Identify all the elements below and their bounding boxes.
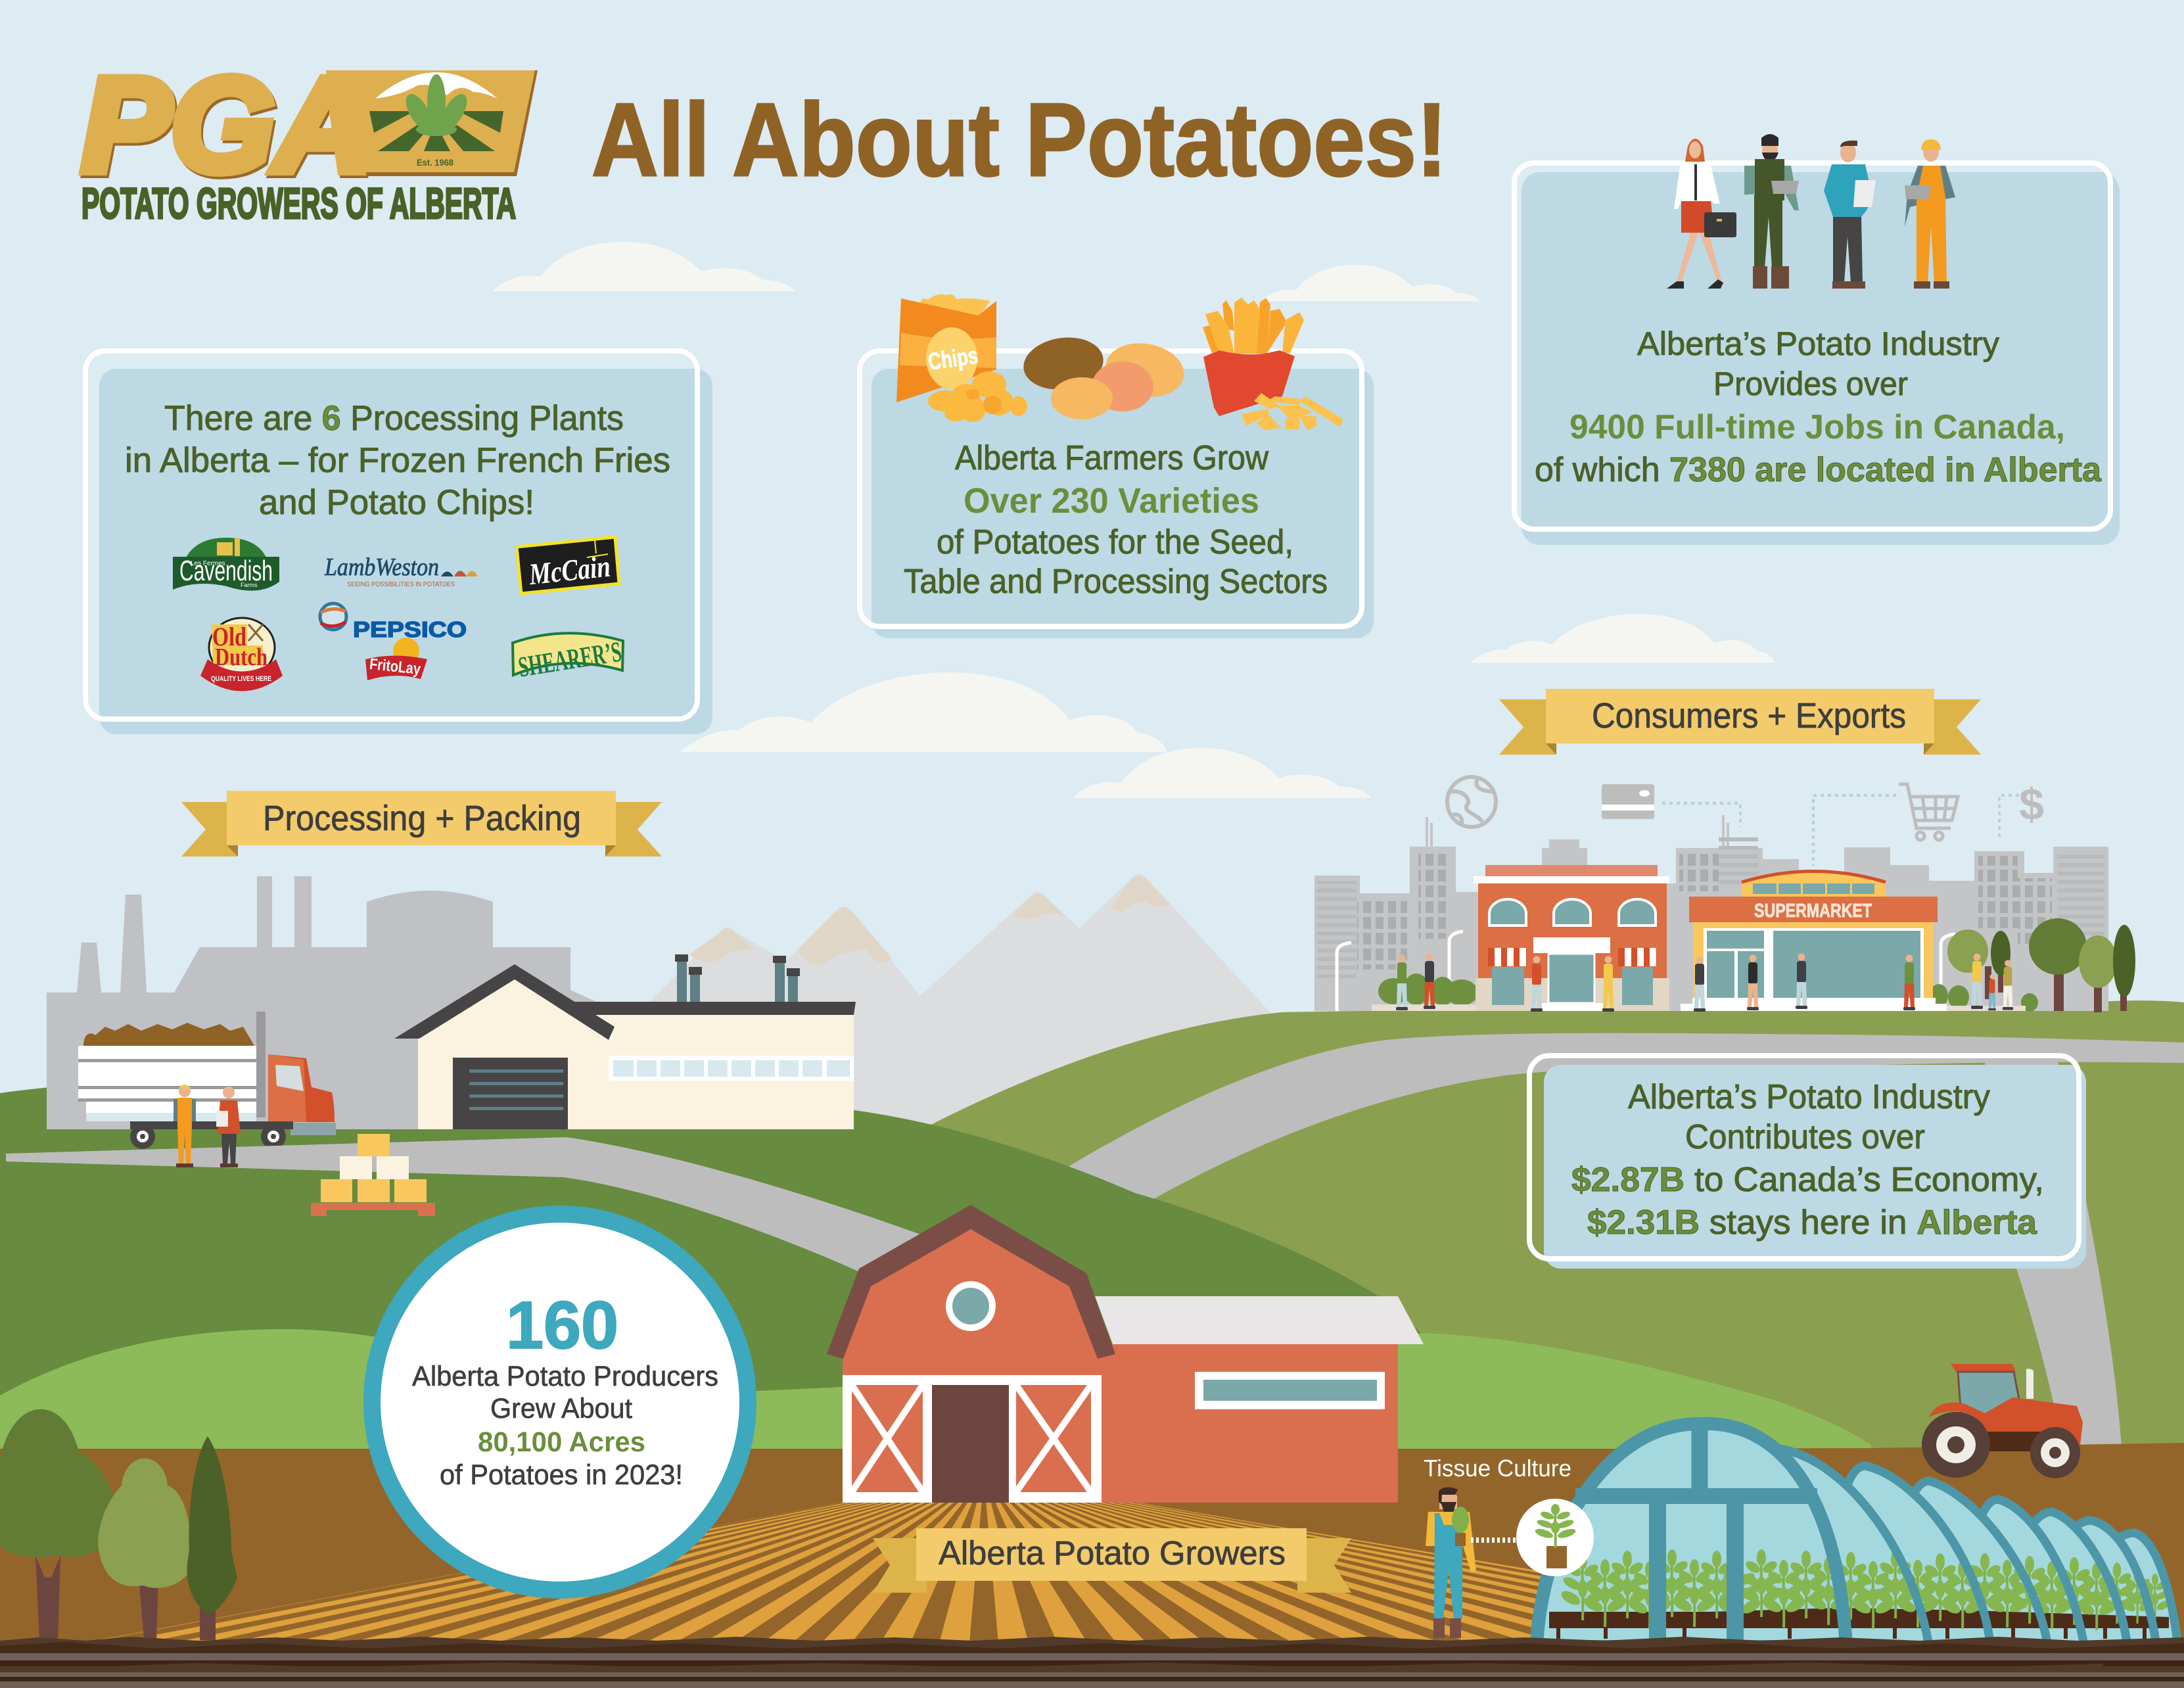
logo crest: Est. 1968 xyxy=(417,157,453,168)
bench and soil trays xyxy=(1549,1608,2169,1639)
factory silhouette xyxy=(47,876,605,1129)
barn front xyxy=(827,1205,1115,1503)
greenhouse front frame xyxy=(1537,1424,2178,1647)
logo: Shearer's: SHEARER’S xyxy=(516,636,624,684)
left trees xyxy=(0,1409,237,1642)
logo: Lamb Weston: LambWeston xyxy=(324,553,439,581)
banner: Alberta Potato Growers: Alberta Potato Growers xyxy=(939,1534,1286,1572)
tractor xyxy=(1922,1364,2083,1478)
people: industry workers xyxy=(1667,134,1955,289)
greenhouse xyxy=(1537,1424,2178,1647)
panel: full-time jobs: Provides over xyxy=(1713,365,1908,402)
banner: Processing + Packing xyxy=(181,791,662,856)
panel: economy contribution: Contributes over xyxy=(1685,1118,1925,1156)
panel: potato varieties: Alberta Farmers Grow xyxy=(955,439,1268,477)
road: branch to tractor xyxy=(1985,1058,2122,1447)
icon: bag of chips: Chips xyxy=(927,342,980,375)
bushes and planters xyxy=(1372,973,2038,1012)
brown soil xyxy=(0,1443,2184,1688)
logo: Cavendish Farms xyxy=(173,538,279,591)
banner: Consumers + Exports: Consumers + Exports xyxy=(1592,696,1906,736)
supermarket sign text: SUPERMARKET xyxy=(1754,901,1872,922)
stat circle: 160 producers: Alberta Potato Producers xyxy=(412,1361,718,1392)
banner: Consumers + Exports xyxy=(1499,689,1981,755)
panel: full-time jobs: 9400 Full-time Jobs in Canada, xyxy=(1569,408,2065,446)
hill: bright green hills xyxy=(0,1329,1871,1466)
delivery truck xyxy=(78,1012,336,1149)
stat circle: 160 producers: 160 xyxy=(506,1288,618,1363)
dotted connector lines xyxy=(1662,795,2019,866)
logo: PepsiCo xyxy=(320,603,467,642)
hill: dark green processing hill xyxy=(0,1077,1429,1512)
dotted link to plant xyxy=(1471,1537,1516,1543)
farmer holding seedling xyxy=(1426,1487,1476,1638)
stat circle: 160 producers: Grew About xyxy=(490,1393,632,1424)
panel: potato varieties: Over 230 Varieties xyxy=(964,481,1259,521)
tissue culture label: Tissue Culture xyxy=(1424,1455,1571,1482)
road: upper road to consumers xyxy=(1052,1033,2184,1209)
logo crest xyxy=(369,72,503,168)
panel: potato varieties xyxy=(860,294,1374,638)
foreground soil xyxy=(0,1637,2184,1688)
stat circle: 160 producers: 80,100 Acres xyxy=(478,1426,645,1458)
logo: Shearer's xyxy=(513,633,624,684)
barn xyxy=(827,1205,1424,1503)
stat circle: 160 producers: of Potatoes in 2023! xyxy=(440,1459,683,1491)
logo: Cavendish Farms: Farms xyxy=(241,582,258,588)
icon: potatoes xyxy=(1020,333,1188,419)
panel: economy contribution: Alberta’s Potato Industry xyxy=(1628,1078,1990,1116)
logo: PepsiCo: PEPSICO xyxy=(353,617,467,642)
city skyline xyxy=(1314,815,2108,1011)
crop field stripes xyxy=(101,1503,1541,1641)
clouds xyxy=(492,242,1775,798)
barn side wing xyxy=(1095,1296,1424,1503)
icon: globe xyxy=(1447,777,1496,827)
panel: full-time jobs xyxy=(1514,134,2120,545)
processing plant building xyxy=(394,954,856,1129)
icon: bag of chips xyxy=(896,294,1027,422)
street lamps xyxy=(1337,931,1955,1011)
logo tagline: POTATO GROWERS OF ALBERTA xyxy=(81,179,516,227)
logo: Cavendish Farms: Cavendish xyxy=(179,555,273,587)
icon: credit card xyxy=(1602,784,1654,819)
PGA logo: PGA xyxy=(83,53,373,202)
road: lower road to barn xyxy=(6,1137,933,1278)
banner: Alberta Potato Growers xyxy=(873,1528,1351,1593)
panel: processing plants xyxy=(85,351,712,734)
logo: Cavendish Farms: Les Fermes xyxy=(191,560,225,567)
panel: full-time jobs: Alberta’s Potato Industry xyxy=(1637,325,1999,362)
banner: Processing + Packing: Processing + Packing xyxy=(263,799,581,838)
panel: economy contribution: $2.87B to Canada’s Economy, xyxy=(1571,1161,2044,1199)
mountains xyxy=(645,874,1274,1150)
logo: Old Dutch: Old xyxy=(212,622,246,651)
logo: McCain xyxy=(517,537,619,594)
panel: full-time jobs: of which 7380 are located in Alberta xyxy=(1535,451,2102,489)
factory workers xyxy=(174,1085,241,1167)
logo: Frito Lay xyxy=(365,638,427,680)
stacked boxes on pallet xyxy=(311,1134,435,1216)
panel: processing plants: and Potato Chips! xyxy=(259,483,534,522)
hill: olive background hill xyxy=(907,1000,2184,1512)
logo: Lamb Weston xyxy=(324,553,478,588)
logo: Lamb Weston: SEEING POSSIBILITIES IN POTATOES xyxy=(347,581,455,588)
logo wordmark: PGA xyxy=(81,50,371,200)
plant circle icon xyxy=(1516,1499,1594,1576)
PGA logo xyxy=(81,50,538,227)
icon: french fries xyxy=(1203,298,1343,431)
title: All About Potatoes! xyxy=(592,82,1447,198)
logo: McCain: McCain xyxy=(527,550,612,591)
logo: Old Dutch: Dutch xyxy=(215,644,267,671)
icon: dollar sign: $ xyxy=(2019,780,2044,830)
logo: Old Dutch xyxy=(200,618,283,692)
logo emblem plate xyxy=(326,70,538,176)
panel: processing plants: in Alberta – for Frozen French Fries xyxy=(125,441,670,480)
panel: economy contribution: $2.31B stays here in Alberta xyxy=(1587,1204,2037,1242)
logo: Frito Lay: FritoLay xyxy=(369,655,422,678)
stat circle: 160 producers xyxy=(372,1214,748,1590)
supermarket building xyxy=(1681,872,1947,1011)
right trees xyxy=(1947,918,2135,1012)
panel: processing plants: There are 6 Processing Plants xyxy=(164,399,624,438)
icon: shopping cart xyxy=(1899,784,1958,840)
seedlings xyxy=(1559,1549,2172,1630)
logo: Old Dutch: QUALITY LIVES HERE xyxy=(211,675,271,683)
store building xyxy=(1474,865,1669,1011)
panel: economy contribution xyxy=(1529,1056,2086,1269)
panel: potato varieties: of Potatoes for the Seed, xyxy=(937,523,1293,561)
shoppers xyxy=(1396,953,2013,1012)
panel: potato varieties: Table and Processing Sectors xyxy=(904,563,1328,601)
